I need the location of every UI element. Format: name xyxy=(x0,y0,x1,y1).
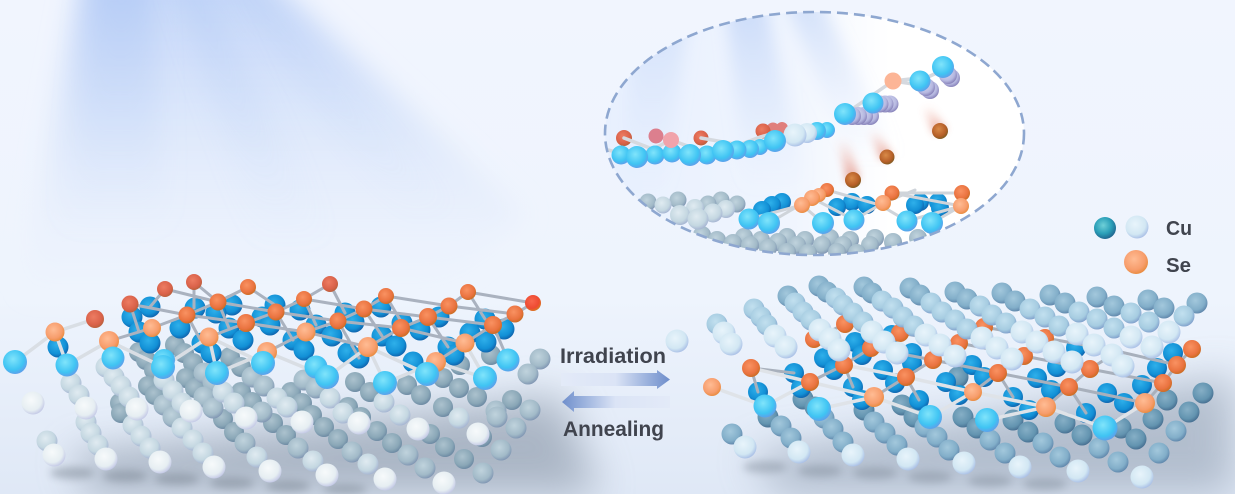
Cu atoms, bright front layer, right lattice xyxy=(754,394,1118,440)
legend: Cu pale atom xyxy=(1126,216,1148,238)
inset: upper sheet, Cu atoms xyxy=(612,56,960,168)
Se atoms, left lattice xyxy=(46,274,541,372)
inset: upper sheet Se atoms, back xyxy=(616,122,788,146)
Cu atoms, bright front layer, left lattice xyxy=(3,346,520,395)
light beam xyxy=(20,0,525,300)
legend: Se label: Se xyxy=(1166,255,1191,277)
right lattice: annealed Cu-Se structure xyxy=(703,276,1214,488)
inset contents xyxy=(608,0,970,262)
inset: magnified view of Se atoms leaving the lattice xyxy=(605,0,1024,262)
inset: upper sheet, bonds xyxy=(608,70,943,157)
label: Annealing: Annealing xyxy=(563,418,664,441)
lone atom between the lattices xyxy=(666,330,688,352)
legend: Se atom xyxy=(1124,250,1148,274)
inset: lower sheet, grey Cu atoms xyxy=(640,192,746,230)
lower Cu layer, right lattice xyxy=(722,366,1214,488)
label: Irradiation: Irradiation xyxy=(560,345,666,368)
inset: lower sheet, Se atoms xyxy=(794,183,970,214)
inset: lower sheet, bonds xyxy=(758,188,955,220)
inset background xyxy=(605,12,1024,255)
arrow: annealing, pointing left xyxy=(562,391,670,412)
arrow: irradiation, pointing right xyxy=(561,370,670,389)
bonds, right lattice xyxy=(712,324,1192,428)
Cu atoms, dark blue layer, left lattice xyxy=(48,294,514,372)
Cu atoms, dark blue layer, right lattice xyxy=(748,325,1183,423)
inset: dashed outline xyxy=(605,12,1024,255)
left lattice: irradiated Cu-Se structure xyxy=(3,274,550,494)
inset: lower sheet, blue Cu atoms xyxy=(753,193,949,219)
Se atoms, right lattice xyxy=(703,315,1201,417)
shadows under the left lattice xyxy=(50,467,367,494)
legend xyxy=(1094,216,1192,277)
bonds, left lattice xyxy=(15,282,533,383)
inset: departing Se atoms xyxy=(845,123,948,188)
inset: lower sheet, bright Cu atoms xyxy=(738,208,943,234)
legend: Cu dark atom xyxy=(1094,217,1116,239)
legend: Cu label: Cu xyxy=(1166,218,1192,240)
inset: lower grey Cu rows xyxy=(694,226,927,255)
shadows under the right lattice xyxy=(743,461,1067,490)
lower Cu layer, left lattice xyxy=(22,335,550,494)
inset: tails of departing Se atoms xyxy=(836,105,947,182)
upper Cu layer, right lattice xyxy=(706,276,1208,378)
